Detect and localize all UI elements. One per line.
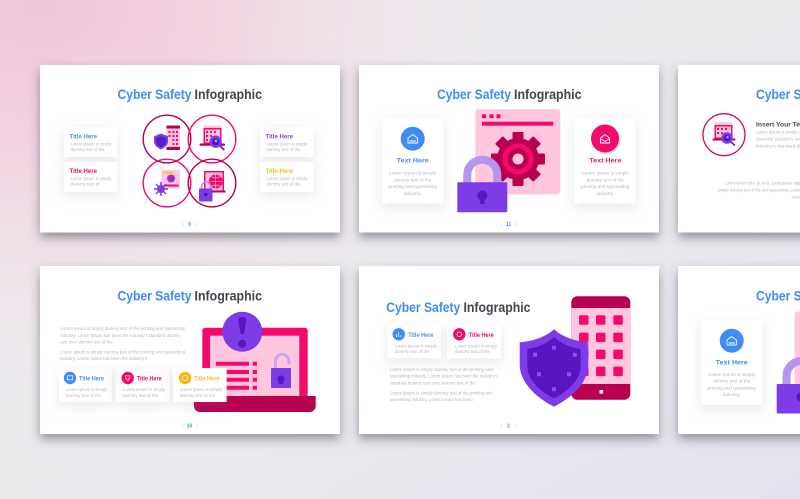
page number: ›	[515, 424, 517, 430]
slide 10: laptop alert	[40, 266, 340, 434]
icon circle: laptop and magnifier	[703, 114, 745, 156]
laptop	[194, 312, 316, 412]
title: Infographic	[194, 288, 262, 304]
phone	[571, 296, 630, 400]
card: blue title: dummy text of the	[70, 147, 105, 152]
card: yellow title: Lorem Ipsum is simply	[180, 387, 223, 392]
card: yellow title	[173, 368, 227, 402]
slide 9: four circle icons	[40, 65, 340, 232]
text block: insert your text	[756, 122, 800, 148]
card: left text: Lorem Ipsum is simply	[389, 170, 437, 176]
card: text here: industry.	[723, 392, 740, 397]
paragraphs: Lorem Ipsum is simply dummy text of the printing and typesetting	[60, 326, 186, 331]
card: right text: Lorem Ipsum is simply	[582, 170, 629, 176]
card: right text: dummy text of the	[587, 177, 624, 182]
padlock	[457, 160, 507, 212]
page number: 9	[188, 222, 191, 228]
page number	[500, 222, 517, 228]
page number: ‹	[182, 424, 184, 430]
paragraphs: Lorem Ipsum is simply dummy text of the printing and typesetting	[60, 350, 185, 354]
card: blue title: Lorem Ipsum is simply	[70, 142, 112, 146]
card: text here: Lorem Ipsum is simply	[708, 372, 756, 377]
card: left text: dummy text of the	[394, 177, 432, 182]
title	[118, 87, 262, 102]
page number: ›	[515, 222, 517, 228]
card: yellow title: Lorem Ipsum is simply	[266, 176, 308, 181]
page number: ‹	[500, 222, 502, 228]
card: right text: printing and typesetting	[581, 184, 630, 189]
browser window and padlock	[777, 312, 800, 414]
title: Cyber Safety	[118, 87, 192, 102]
paragraphs	[390, 367, 498, 402]
page number: 10	[187, 424, 192, 430]
card: purple title: Lorem Ipsum is simply	[266, 142, 308, 146]
paragraphs: typesetting industry. Lorem Ipsum has been the industry's	[390, 374, 498, 378]
card: pink title: Title Here	[469, 333, 494, 339]
card: pink title	[116, 368, 169, 402]
card: left text: industry.	[404, 191, 421, 196]
page number: ›	[196, 222, 198, 228]
card: right text	[574, 118, 636, 204]
card: purple title	[260, 127, 314, 157]
card: yellow title: dummy text of the	[266, 182, 301, 186]
card: pink title: Lorem Ipsum is simply	[70, 176, 112, 181]
card: pink title: dummy text of the	[123, 393, 158, 398]
card: pink title	[447, 324, 501, 358]
card: pink title	[64, 162, 118, 192]
card: pink title: dummy text of the	[455, 349, 490, 354]
card: yellow title	[260, 162, 314, 192]
page number	[182, 222, 198, 228]
icon circle: shield and phone	[143, 115, 191, 163]
card: text here: dummy text of the	[713, 378, 751, 384]
title: Infographic	[464, 300, 531, 315]
card: yellow title: Title Here	[194, 376, 220, 382]
slide cropped right: bottom	[678, 266, 800, 434]
card: blue title: Lorem Ipsum is simply	[66, 387, 108, 392]
title: Infographic	[514, 87, 582, 102]
card: blue title	[59, 368, 112, 402]
text block: paragraph	[718, 180, 800, 200]
paragraphs: industry. Lorem Ipsum has been the industry's standard dummy	[60, 333, 181, 338]
title: Cyber Safety	[437, 87, 511, 102]
card: yellow title: Title Here	[266, 169, 294, 175]
card: blue title: Title Here	[408, 333, 434, 339]
title: Infographic	[194, 87, 262, 102]
card: text here	[701, 320, 762, 405]
card: text here: printing and typesetting	[707, 385, 756, 390]
title: Cyber Safety	[386, 300, 461, 315]
card: purple title: Title Here	[266, 134, 294, 140]
card: left text	[382, 118, 444, 204]
slide cropped right: top	[678, 65, 800, 232]
gear	[491, 132, 545, 186]
card: pink title: Title Here	[70, 169, 98, 175]
card: blue title: dummy text of the	[66, 393, 101, 398]
card: yellow title: dummy text of the	[180, 393, 215, 398]
paragraphs: standard dummy text ever dummy text of the	[390, 380, 476, 385]
page number: 2	[507, 424, 510, 430]
paragraphs: Lorem Ipsum is simply dummy text of the printing and	[390, 367, 493, 372]
paragraphs: typesetting industry. Lorem Ipsum has been	[390, 397, 473, 402]
page number: ‹	[500, 424, 502, 430]
card: pink title: Lorem Ipsum is simply	[455, 344, 498, 348]
title	[437, 87, 582, 102]
card: pink title: Title Here	[137, 376, 162, 382]
card: blue title: Title Here	[79, 376, 105, 382]
card: pink title: dummy text of	[70, 182, 100, 186]
card: pink title: Lorem Ipsum is simply	[123, 387, 166, 392]
slide 2: shield and phone	[359, 266, 659, 434]
page number	[500, 424, 517, 430]
card: right text: industry.	[597, 191, 614, 196]
paragraphs: text ever dummy text of the	[60, 340, 113, 344]
paragraphs: Lorem Ipsum is simply dummy text of the printing and	[390, 390, 493, 395]
page number	[182, 424, 198, 430]
page number: ›	[196, 424, 198, 430]
text block: insert your text: Insert Your Text	[756, 122, 800, 128]
card: text here: Text Here	[716, 360, 748, 366]
title	[118, 288, 262, 304]
slide 11: gear and padlock	[359, 65, 659, 232]
icon circle: laptop and magnifier	[188, 115, 236, 163]
page number: ‹	[182, 222, 184, 228]
card: blue title	[64, 127, 118, 157]
icon circle: globe and padlock	[188, 159, 236, 207]
shield	[520, 329, 588, 407]
card: blue title: Title Here	[70, 134, 98, 140]
card: purple title: dummy text of the	[266, 147, 301, 152]
card: left text: Text Here	[397, 158, 429, 164]
page number: 11	[506, 222, 511, 228]
card: blue title: Lorem Ipsum is simply	[395, 344, 437, 348]
browser window	[475, 109, 560, 194]
title: Cyber Safety	[118, 288, 192, 304]
paragraphs: industry. Lorem Ipsum has been the industry's	[60, 356, 148, 361]
card: right text: Text Here	[589, 158, 622, 164]
card: left text: printing and typesetting	[388, 184, 437, 189]
card: blue title: dummy text of the	[395, 349, 430, 354]
icon circle: virus and window	[143, 159, 191, 207]
paragraphs	[60, 326, 186, 361]
card: blue title	[387, 324, 441, 358]
title	[386, 300, 531, 315]
